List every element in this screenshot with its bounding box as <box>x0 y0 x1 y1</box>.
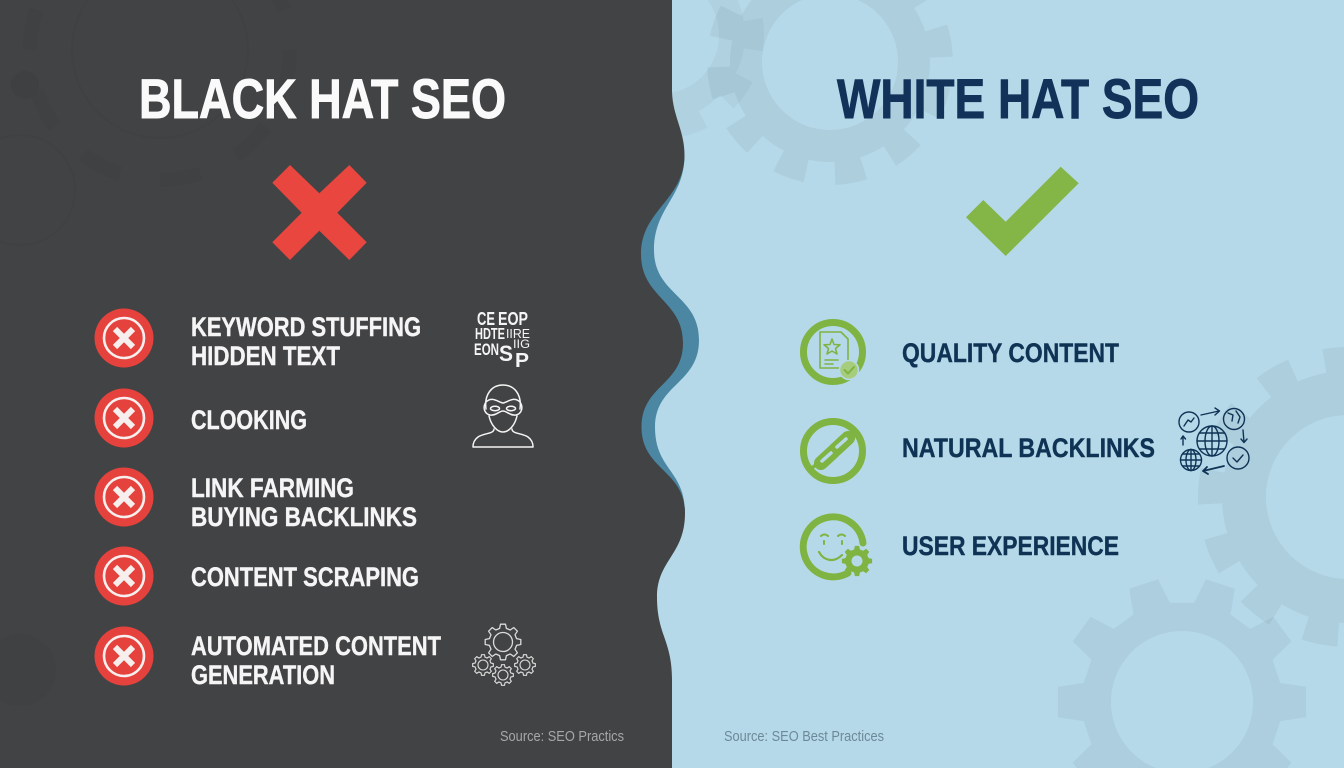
list item: keyword stuffing, hidden text <box>94 308 421 371</box>
icon: jumbled letters: HDTE <box>475 326 505 343</box>
label: HIDDEN TEXT <box>191 341 340 371</box>
source: white hat: Source: SEO Best Practices <box>724 729 884 745</box>
icon: large green check <box>966 167 1079 256</box>
list item: clooking <box>94 388 307 448</box>
background gear: bottom <box>1058 579 1306 768</box>
list item: natural backlinks <box>804 422 1155 480</box>
label: KEYWORD STUFFING <box>191 312 421 342</box>
list item: link farming, buying backlinks <box>94 468 417 532</box>
list item: automated content generation <box>94 626 441 690</box>
icon: jumbled letters: S <box>499 341 513 366</box>
label: LINK FARMING <box>191 473 354 503</box>
list item: content scraping <box>94 546 419 606</box>
icon: jumbled letters: CE <box>477 309 495 329</box>
icon: masked person <box>473 385 533 447</box>
icon: document with star <box>804 322 862 382</box>
background gear: top <box>701 0 959 191</box>
icon: jumbled letters: P <box>515 350 529 372</box>
icon: large red cross <box>272 165 367 260</box>
icon: jumbled letters: IIRE <box>506 326 530 341</box>
title: white hat seo: WHITE HAT SEO <box>837 67 1199 130</box>
list item: quality content <box>804 322 1119 382</box>
icon: jumbled letters: EOP <box>498 309 528 329</box>
label: USER EXPERIENCE <box>902 531 1119 561</box>
icon: jumbled letters <box>474 309 530 372</box>
faint background gears <box>0 0 290 706</box>
label: AUTOMATED CONTENT <box>191 631 441 661</box>
icon: red x badge <box>94 308 154 368</box>
icon: red x badge <box>94 626 154 686</box>
icon: globes network <box>1179 408 1249 474</box>
icon: chain link slash <box>804 422 862 480</box>
label: GENERATION <box>191 660 335 690</box>
icon: jumbled letters: IIG <box>513 337 530 351</box>
icon: red x badge <box>94 546 154 606</box>
icon: red x badge <box>94 388 154 448</box>
icon: gears <box>473 624 535 685</box>
icon: red x badge <box>94 468 154 526</box>
label: CONTENT SCRAPING <box>191 562 419 592</box>
list item: user experience <box>803 517 1119 577</box>
background gear: top left small <box>566 0 754 129</box>
label: QUALITY CONTENT <box>902 338 1119 368</box>
panel: black hat background <box>0 0 685 768</box>
label: CLOOKING <box>191 405 307 435</box>
label: BUYING BACKLINKS <box>191 502 417 532</box>
icon: smile with gear <box>803 517 872 577</box>
icon: jumbled letters: EON <box>474 340 499 359</box>
label: NATURAL BACKLINKS <box>902 433 1155 463</box>
source: black hat: Source: SEO Practics <box>500 729 624 745</box>
background gear: right <box>1175 324 1344 670</box>
title: black hat seo: BLACK HAT SEO <box>139 67 506 130</box>
wave divider band <box>600 155 699 513</box>
